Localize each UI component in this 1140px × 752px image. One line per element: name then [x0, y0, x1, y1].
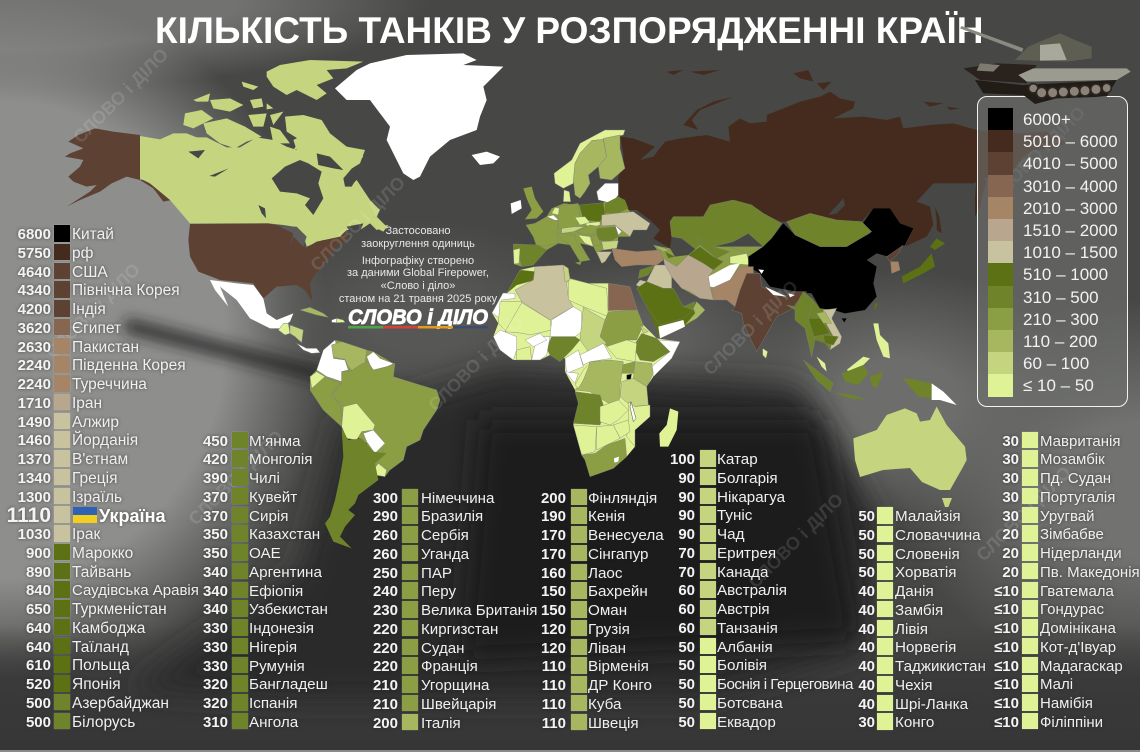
list column 1: США: [72, 264, 108, 280]
list column 7: Зімбабве: [1040, 526, 1104, 543]
list column 1: Білорусь: [72, 714, 135, 730]
list column 7: Мадагаскар: [1040, 658, 1123, 674]
list column 3: ПАР: [421, 564, 452, 582]
list column 2: 340: [203, 582, 228, 600]
list column 5: Еквадор: [717, 714, 776, 730]
list column 4: Фінляндія: [588, 490, 657, 506]
East and Southeast Asia: [787, 238, 957, 405]
list column 1: 500: [26, 714, 51, 730]
list column 7: [994, 432, 1140, 731]
list column 7: 30: [1002, 508, 1019, 524]
list column 7: Намібія: [1040, 695, 1093, 712]
list column 3: 210: [373, 696, 398, 713]
list column 2: 320: [203, 676, 228, 693]
list column 1: Таїланд: [72, 638, 129, 656]
list column 3: 200: [373, 714, 398, 732]
list column 2: 420: [203, 451, 228, 468]
icon: tank: [960, 26, 1130, 104]
list column 7: Мавританія: [1040, 432, 1120, 450]
legend colour scale: 4010 – 5000: [1023, 154, 1118, 173]
list column 1: Тайвань: [72, 564, 131, 580]
list column 5: 50: [678, 695, 695, 712]
list column 2: 330: [203, 620, 228, 637]
list column 1: 500: [26, 695, 51, 712]
list column 7: 30: [1002, 432, 1019, 450]
list column 6: Данія: [895, 583, 934, 600]
list column 1: Пакистан: [72, 338, 139, 356]
list column 1: 1460: [18, 432, 51, 449]
list column 1: рф: [72, 245, 93, 262]
Great Lakes: [280, 227, 307, 247]
list column 1: Греція: [72, 470, 117, 487]
list column 3: Сербія: [421, 527, 469, 544]
list column 5: Боснія і Герцеговина: [717, 676, 853, 693]
watermarks: СЛОВО і ДІЛО: [424, 312, 527, 415]
list column 4: 170: [541, 546, 566, 563]
list column 2: Чилі: [249, 470, 280, 487]
Australia: [853, 407, 967, 507]
list column 3: 260: [373, 546, 398, 563]
list column 6: 40: [858, 677, 875, 694]
list column 5: 90: [678, 470, 695, 487]
Alaska: [65, 128, 172, 207]
list column 4: Грузія: [588, 621, 630, 638]
legend colour scale: 310 – 500: [1023, 288, 1099, 307]
list column 2: Ангола: [249, 714, 298, 731]
list column 1: 4200: [18, 301, 51, 318]
legend colour scale: ≤ 10 – 50: [1023, 376, 1094, 395]
list column 1: 3620: [18, 320, 51, 337]
list column 2: 330: [203, 658, 228, 674]
list column 6: Норвегія: [895, 639, 956, 656]
watermarks: СЛОВО і ДІЛО: [986, 102, 1089, 205]
list column 1: Саудівська Аравія: [72, 582, 199, 599]
Central and South America: [278, 307, 440, 477]
list column 2: Нігерія: [249, 639, 297, 656]
list column 6: 30: [858, 714, 875, 731]
list column 6: Хорватія: [895, 564, 956, 581]
list column 1: 1300: [18, 488, 51, 506]
list column 7: ≤10: [994, 601, 1019, 618]
list column 6: Таджикистан: [895, 658, 986, 675]
Iceland: [472, 152, 500, 165]
list column 2: 370: [203, 508, 228, 524]
list column 5: 60: [678, 601, 695, 618]
list column 5: 70: [678, 564, 695, 580]
list column 1: Єгипет: [72, 320, 121, 337]
list column 7: Пд. Судан: [1040, 470, 1111, 487]
list column 2: 350: [203, 545, 228, 562]
list column 1: 610: [26, 657, 51, 674]
list column 7: Гватемала: [1040, 582, 1114, 600]
list column 3: 210: [373, 677, 398, 694]
list column 1: 900: [26, 545, 51, 562]
China: [748, 208, 913, 322]
list column 6: 40: [858, 620, 875, 638]
list column 4: 150: [541, 602, 566, 619]
list column 2: Монголія: [249, 451, 312, 468]
list column 7: 20: [1002, 526, 1019, 543]
list column 3: Німеччина: [421, 490, 494, 506]
list column 6: 50: [858, 527, 875, 544]
list column 6: 40: [858, 583, 875, 600]
list column 3: Франція: [421, 658, 478, 675]
list column 3: Угорщина: [421, 677, 489, 694]
legend colour scale: 110 – 200: [1023, 332, 1097, 351]
list column 2: М’янма: [249, 432, 301, 450]
list column 7: Нідерланди: [1040, 545, 1122, 562]
list column 7: ≤10: [994, 582, 1019, 600]
list column 1: Туреччина: [72, 376, 147, 393]
list column 4: Кенія: [588, 508, 625, 525]
list column 5: 60: [678, 582, 695, 599]
list column 5: [670, 450, 854, 730]
list column 1: 1370: [18, 451, 51, 468]
list column 3: Уганда: [421, 546, 469, 563]
Russia: [618, 70, 1067, 248]
list column 7: 30: [1002, 451, 1019, 468]
list column 7: ≤10: [994, 714, 1019, 731]
list column 2: 340: [203, 564, 228, 581]
list column 1: 4340: [18, 282, 51, 299]
list column 7: Пв. Македонія: [1040, 564, 1140, 581]
list column 4: 160: [541, 564, 566, 582]
list column 5: Австрія: [717, 601, 770, 618]
list column 4: Бахрейн: [588, 583, 648, 600]
watermarks: СЛОВО і ДІЛО: [69, 44, 172, 147]
list column 1: Польща: [72, 657, 130, 674]
watermarks: СЛОВО і ДІЛО: [306, 172, 409, 275]
list column 5: Болівія: [717, 657, 767, 674]
list column 1: 1710: [18, 395, 51, 412]
list column 5: 50: [678, 657, 695, 674]
list column 5: 50: [678, 676, 695, 693]
watermarks: СЛОВО і ДІЛО: [184, 426, 287, 529]
list column 7: 30: [1002, 489, 1019, 506]
list column 6: Словенія: [895, 546, 960, 562]
legend colour scale: 60 – 100: [1023, 354, 1089, 373]
Argentina and Chile: [325, 428, 387, 548]
list column 2: Сирія: [249, 508, 288, 524]
list column 3: Велика Британія: [421, 602, 537, 619]
list column 7: Філіппіни: [1040, 714, 1103, 731]
list column 2: Бангладеш: [249, 676, 328, 693]
list column 5: 70: [678, 545, 695, 562]
text: «Слово і діло»: [381, 280, 455, 292]
watermarks: СЛОВО і ДІЛО: [41, 259, 144, 362]
list column 6: 40: [858, 602, 875, 619]
list column 2: Румунія: [249, 658, 305, 674]
list column 4: Куба: [588, 696, 621, 713]
list column 1: 650: [26, 601, 51, 618]
list column 5: Канада: [717, 564, 768, 580]
list column 2: Казахстан: [249, 526, 320, 543]
list column 6: 50: [858, 564, 875, 581]
list column 6: Конго: [895, 714, 934, 731]
list column 6: 40: [858, 639, 875, 656]
list column 5: 50: [678, 714, 695, 730]
watermarks: СЛОВО і ДІЛО: [972, 462, 1075, 565]
list column 3: 260: [373, 527, 398, 544]
list column 1: Північна Корея: [72, 282, 180, 299]
list column 5: 90: [678, 526, 695, 543]
list column 5: Албанія: [717, 638, 773, 656]
list column 6: [858, 506, 986, 731]
USA: [188, 223, 348, 302]
list column 5: 50: [678, 638, 695, 656]
list column 1: 4640: [18, 264, 51, 280]
list column 2: Аргентина: [249, 564, 322, 581]
list column 1: Китай: [72, 226, 114, 243]
list column 7: ≤10: [994, 658, 1019, 674]
list column 7: ≤10: [994, 676, 1019, 693]
Eurasia, Africa and Oceania: [492, 70, 1067, 507]
list column 1: 840: [26, 582, 51, 599]
text: за даними Global Firepower,: [347, 267, 489, 279]
list column 1: 2240: [18, 376, 51, 393]
list column 4: ДР Конго: [588, 677, 652, 694]
list column 1: 5750: [18, 245, 51, 262]
list column 2: 320: [203, 695, 228, 712]
list column 3: [373, 488, 537, 732]
list column 3: 220: [373, 621, 398, 638]
list column 2: Іспанія: [249, 695, 297, 712]
list column 3: 300: [373, 490, 398, 506]
list column 3: 290: [373, 508, 398, 525]
list column 4: Венесуела: [588, 527, 664, 544]
list column 2: Кувейт: [249, 489, 297, 506]
text: Інфографіку створено: [362, 255, 474, 267]
list column 7: Гондурас: [1040, 601, 1104, 618]
list column 1: 890: [26, 564, 51, 580]
list column 7: Малі: [1040, 676, 1073, 693]
Africa: [492, 265, 680, 477]
text: станом на 21 травня 2025 року: [339, 293, 497, 305]
list column 3: Киргизстан: [421, 621, 498, 638]
list column 2: 310: [203, 714, 228, 731]
list column 3: 250: [373, 564, 398, 582]
list column 4: 170: [541, 527, 566, 544]
list column 5: Танзанія: [717, 620, 778, 637]
list column 1: Камбоджа: [72, 620, 145, 637]
list column 7: 30: [1002, 470, 1019, 487]
list column 7: ≤10: [994, 620, 1019, 637]
list column 2: 370: [203, 489, 228, 506]
list column 4: [541, 488, 664, 732]
list column 1: 520: [26, 676, 51, 693]
list column 4: 110: [542, 714, 566, 732]
list column 1: 2630: [18, 338, 51, 356]
list column 4: 110: [542, 658, 566, 675]
list column 7: Мозамбік: [1040, 451, 1105, 468]
legend colour scale: [988, 108, 1118, 397]
list column 6: Лівія: [895, 620, 928, 638]
list column 5: Австралія: [717, 582, 787, 599]
Europe: [511, 130, 663, 267]
Kazakhstan: [670, 200, 782, 250]
list column 1: Алжир: [72, 414, 119, 430]
legend colour scale: 1010 – 1500: [1023, 243, 1118, 262]
list column 4: 120: [541, 621, 566, 638]
list column 1: 640: [26, 638, 51, 656]
list column 4: 190: [541, 508, 566, 525]
list column 7: Кот-д'Івуар: [1040, 639, 1116, 656]
list column 6: Шрі-Ланка: [895, 696, 968, 712]
list column 2: 330: [203, 639, 228, 656]
list column 2: 450: [203, 432, 228, 450]
list column 4: 120: [541, 640, 566, 656]
list column 4: 110: [542, 677, 566, 694]
legend colour scale: 5010 – 6000: [1023, 132, 1118, 151]
list column 3: 240: [373, 583, 398, 600]
list column 6: Замбія: [895, 602, 943, 619]
legend colour scale: 210 – 300: [1023, 310, 1099, 329]
list column 5: Туніс: [717, 507, 752, 524]
list column 2: Узбекистан: [249, 601, 328, 618]
list column 4: 200: [541, 490, 566, 506]
legend panel: [977, 96, 1128, 407]
list column 4: Швеція: [588, 714, 639, 732]
list column 7: 20: [1002, 545, 1019, 562]
list column 3: Швейцарія: [421, 696, 496, 713]
list column 5: Болгарія: [717, 470, 778, 487]
watermarks: СЛОВО і ДІЛО: [699, 276, 802, 379]
list column 5: 90: [678, 507, 695, 524]
legend colour scale: 2010 – 3000: [1023, 199, 1118, 218]
list column 3: Італія: [421, 714, 461, 732]
list column 4: Вірменія: [588, 658, 649, 675]
legend colour scale: 1510 – 2000: [1023, 221, 1118, 240]
list column 4: Ліван: [588, 640, 626, 656]
list column 2: Індонезія: [249, 620, 314, 637]
list column 1: Азербайджан: [72, 695, 169, 712]
list column 1: Японія: [72, 676, 121, 693]
list column 5: Чад: [717, 526, 744, 543]
list column 3: Перу: [421, 583, 456, 600]
list column 3: Судан: [421, 640, 464, 656]
list column 1: 1110: [7, 504, 51, 527]
list column 6: Чехія: [895, 677, 932, 694]
list column 7: 20: [1002, 564, 1019, 581]
list column 6: Словаччина: [895, 527, 981, 544]
list column 1: В'єтнам: [72, 451, 128, 468]
list column 2: 390: [203, 470, 228, 487]
list column 3: 230: [373, 602, 398, 619]
legend colour scale: 6000+: [1023, 110, 1071, 129]
list column 1: Марокко: [72, 545, 133, 562]
Central Asia: [653, 237, 763, 300]
list column 2: 340: [203, 601, 228, 618]
list column 7: ≤10: [994, 639, 1019, 656]
list column 1: Південна Корея: [72, 357, 186, 374]
list column 1: Ірак: [72, 526, 100, 543]
logo: Слово і діло: СЛОВО і ДІЛО: [348, 306, 488, 329]
list column 4: Лаос: [588, 564, 622, 582]
South Asia: [712, 267, 807, 358]
list column 1: [6, 224, 199, 730]
Middle East: [636, 245, 713, 338]
list column 5: Катар: [717, 451, 758, 468]
list column 4: Сінгапур: [588, 546, 648, 563]
North America: [140, 53, 503, 328]
list column 2: Ефіопія: [249, 582, 303, 600]
Mongolia: [787, 213, 872, 247]
list column 1: 1030: [18, 526, 51, 543]
legend colour scale: 510 – 1000: [1023, 265, 1108, 284]
list column 7: Домінікана: [1040, 620, 1116, 637]
list column 1: 2240: [18, 357, 51, 374]
list column 4: 110: [542, 696, 566, 713]
list column 5: Нікарагуа: [717, 488, 785, 506]
list column 4: 150: [541, 583, 566, 600]
title: КІЛЬКІСТЬ ТАНКІВ У РОЗПОРЯДЖЕННІ КРАЇН: [155, 10, 983, 51]
list column 6: 40: [858, 658, 875, 675]
list column 4: Оман: [588, 602, 627, 619]
list column 3: 220: [373, 640, 398, 656]
list column 7: ≤10: [994, 695, 1019, 712]
list column 5: 60: [678, 620, 695, 637]
Mexico: [210, 280, 293, 328]
list column 1: Іран: [72, 395, 102, 412]
list column 5: Ботсвана: [717, 695, 783, 712]
list column 2: [202, 432, 328, 731]
list column 5: 90: [678, 488, 695, 506]
list column 1: Йорданія: [72, 432, 138, 449]
list column 5: 100: [670, 451, 695, 468]
list column 7: Португалія: [1040, 489, 1115, 506]
list column 3: 220: [373, 658, 398, 675]
list column 1: Туркменістан: [72, 601, 167, 618]
list column 1: Індія: [72, 301, 106, 318]
list column 1: 1490: [18, 414, 51, 430]
list column 5: Еритрея: [717, 545, 776, 562]
list column 3: Бразилія: [421, 508, 483, 525]
list column 1: Україна: [99, 506, 165, 526]
list column 6: 50: [858, 508, 875, 525]
list column 6: Малайзія: [895, 508, 961, 525]
text: заокруглення одиниць: [361, 238, 475, 250]
list column 1: 6800: [18, 226, 51, 243]
list column 1: 1340: [18, 470, 51, 487]
note text: Застосовано: [385, 225, 451, 237]
list column 1: Ізраїль: [72, 488, 122, 506]
list column 1: 640: [26, 620, 51, 637]
watermarks: СЛОВО і ДІЛО: [744, 489, 847, 592]
Greenland: [335, 53, 503, 180]
list column 6: 40: [858, 696, 875, 712]
list column 2: 350: [203, 526, 228, 543]
list column 2: ОАЕ: [249, 545, 281, 562]
list column 7: Уругвай: [1040, 508, 1095, 524]
list column 6: 50: [858, 546, 875, 562]
legend colour scale: 3010 – 4000: [1023, 177, 1118, 196]
